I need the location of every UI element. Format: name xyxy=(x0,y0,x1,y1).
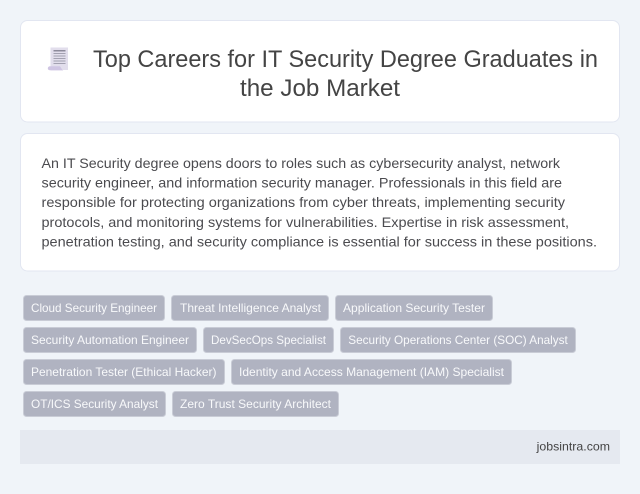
tag: Penetration Tester (Ethical Hacker): Penetration Tester (Ethical Hacker) xyxy=(31,365,217,379)
icon: document scroll xyxy=(48,48,68,70)
tag: OT/ICS Security Analyst xyxy=(24,392,166,416)
tag: Security Operations Center (SOC) Analyst: Security Operations Center (SOC) Analyst xyxy=(348,333,568,347)
tag: Penetration Tester (Ethical Hacker) xyxy=(24,360,224,384)
tag: Security Automation Engineer: Security Automation Engineer xyxy=(31,333,189,347)
tag: Application Security Tester xyxy=(336,296,492,320)
tag: Threat Intelligence Analyst xyxy=(172,296,328,320)
tag: Zero Trust Security Architect xyxy=(172,392,338,416)
panel: footer bar xyxy=(20,430,620,464)
tag: OT/ICS Security Analyst: OT/ICS Security Analyst xyxy=(31,397,159,411)
tag: Zero Trust Security Architect: Zero Trust Security Architect xyxy=(180,397,332,411)
tag: Identity and Access Management (IAM) Specialist xyxy=(232,360,512,384)
text block: description: An IT Security degree opens doors to roles such as cybersecurity analyst, network xyxy=(42,155,561,171)
text block: description: penetration testing, and security compliance is essential for success in these positions. xyxy=(42,233,597,249)
title: the Job Market xyxy=(240,75,400,102)
tag: Cloud Security Engineer: Cloud Security Engineer xyxy=(31,301,157,315)
tag: DevSecOps Specialist xyxy=(204,328,334,352)
tag: Security Operations Center (SOC) Analyst xyxy=(340,328,576,352)
tag: DevSecOps Specialist: DevSecOps Specialist xyxy=(211,333,327,347)
text block: description: responsible for protecting organizations from cyber threats, implementing security xyxy=(42,194,565,210)
tag: Identity and Access Management (IAM) Specialist: Identity and Access Management (IAM) Specialist xyxy=(239,365,505,379)
tag: Application Security Tester: Application Security Tester xyxy=(343,301,485,315)
tag: Cloud Security Engineer xyxy=(24,296,164,320)
text: footer source: jobsintra.com xyxy=(536,440,610,454)
text block: description xyxy=(42,155,597,249)
title: Top Careers for IT Security Degree Graduates in xyxy=(93,46,598,73)
title xyxy=(93,46,598,102)
tag: Threat Intelligence Analyst: Threat Intelligence Analyst xyxy=(180,301,322,315)
panel: career tags xyxy=(24,296,576,416)
panel: description card xyxy=(20,134,620,271)
panel: title card xyxy=(20,20,620,122)
tag: Security Automation Engineer xyxy=(24,328,196,352)
text block: description: protocols, and monitoring systems for vulnerabilities. Expertise in risk assessment, xyxy=(42,214,569,230)
text block: description: security engineer, and information security manager. Professionals in this field are xyxy=(42,175,562,191)
